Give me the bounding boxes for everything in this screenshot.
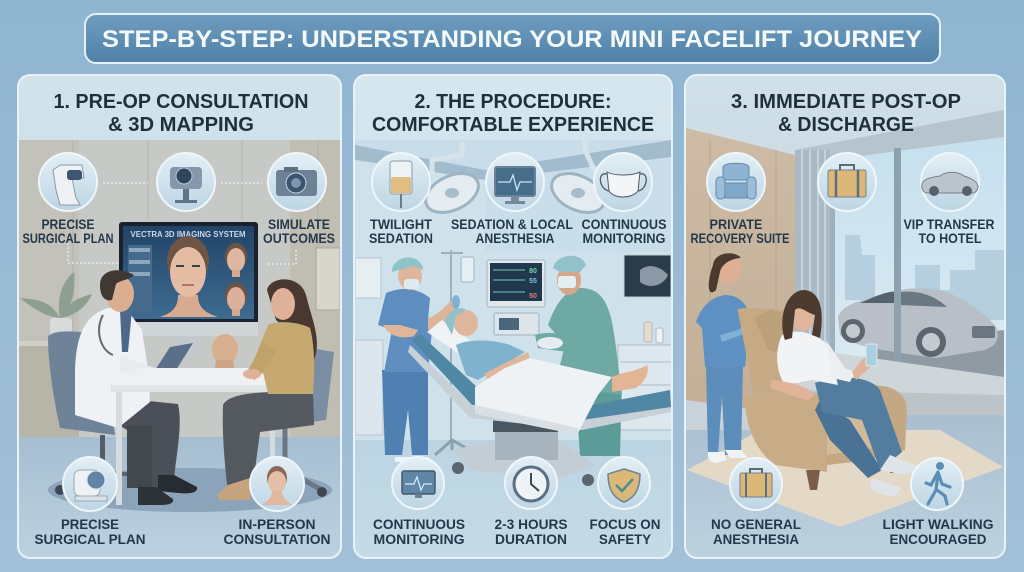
scene: doctor and patient consultation bbox=[19, 140, 340, 558]
label: duration bbox=[494, 517, 568, 547]
icon: IV bag bbox=[372, 153, 430, 211]
label: VIP transfer to hotel: VIP TRANSFER bbox=[904, 217, 995, 232]
label: private recovery suite bbox=[690, 217, 790, 246]
scene: recovery suite bbox=[686, 110, 1004, 558]
icon: camera on stand bbox=[157, 153, 215, 211]
label: focus on safety: FOCUS ON bbox=[590, 517, 660, 532]
panel: immediate post-op and discharge bbox=[685, 75, 1005, 558]
label: precise surgical plan bottom: SURGICAL PLAN bbox=[34, 532, 146, 547]
label: no general anesthesia: NO GENERAL bbox=[711, 517, 801, 532]
label: VIP transfer to hotel bbox=[904, 217, 995, 246]
icon: monitor bottom bbox=[392, 457, 444, 509]
label: light walking encouraged: ENCOURAGED bbox=[890, 532, 987, 547]
label: simulate outcomes: SIMULATE bbox=[268, 217, 330, 232]
label: simulate outcomes: OUTCOMES bbox=[263, 231, 335, 246]
scene: doctor and patient consultation: VECTRA 3D IMAGING SYSTEM bbox=[130, 230, 246, 239]
label: light walking encouraged: LIGHT WALKING bbox=[882, 517, 994, 532]
icon: car bbox=[921, 153, 979, 211]
heading: step 2 bbox=[372, 91, 654, 136]
label: twilight sedation bbox=[369, 217, 433, 246]
heading: step 3: 3. IMMEDIATE POST-OP bbox=[731, 91, 961, 113]
icon: scanner bottom bbox=[63, 457, 117, 511]
label: continuous monitoring bbox=[582, 217, 666, 246]
label: in-person consultation: IN-PERSON bbox=[238, 517, 316, 532]
label: sedation and local anesthesia bbox=[451, 217, 573, 246]
label: no general anesthesia bbox=[711, 517, 801, 547]
panel: the procedure bbox=[354, 75, 672, 558]
heading: step 1: & 3D MAPPING bbox=[108, 114, 254, 136]
scene: operating room: 80 bbox=[529, 268, 537, 275]
icon: vital signs monitor bbox=[486, 153, 544, 211]
label: sedation and local anesthesia: SEDATION & LOCAL bbox=[451, 217, 573, 232]
label: focus on safety: SAFETY bbox=[599, 532, 651, 547]
label: precise surgical plan bbox=[22, 217, 114, 246]
heading: step 1 bbox=[54, 91, 308, 136]
icon: clock bbox=[505, 457, 557, 509]
label: continuous monitoring: MONITORING bbox=[582, 231, 666, 246]
heading: step 3: & DISCHARGE bbox=[778, 114, 914, 136]
label: no general anesthesia: ANESTHESIA bbox=[713, 532, 799, 547]
label: in-person consultation: CONSULTATION bbox=[224, 532, 330, 547]
label: twilight sedation: TWILIGHT bbox=[370, 217, 433, 232]
scene: operating room: 55 bbox=[529, 278, 537, 285]
icon: 3D scanner bbox=[39, 153, 97, 211]
label: duration: DURATION bbox=[495, 532, 567, 547]
label: duration: 2-3 HOURS bbox=[494, 517, 568, 532]
label: continuous monitoring bottom: MONITORING bbox=[374, 532, 464, 547]
icon: camera bbox=[268, 153, 326, 211]
panel: pre-op consultation and 3D mapping bbox=[18, 75, 341, 558]
scene: operating room: 50 bbox=[529, 293, 537, 300]
heading: step 1: 1. PRE-OP CONSULTATION bbox=[54, 91, 308, 113]
label: precise surgical plan bottom: PRECISE bbox=[61, 517, 119, 532]
label: twilight sedation: SEDATION bbox=[369, 231, 433, 246]
label: continuous monitoring: CONTINUOUS bbox=[582, 217, 666, 232]
heading: step 3 bbox=[731, 91, 961, 136]
heading: step 2: 2. THE PROCEDURE: bbox=[414, 91, 612, 113]
label: precise surgical plan: PRECISE bbox=[42, 217, 94, 232]
label: in-person consultation bbox=[224, 517, 330, 547]
label: simulate outcomes bbox=[263, 217, 335, 246]
heading: step 2: COMFORTABLE EXPERIENCE bbox=[372, 114, 654, 136]
title banner: STEP-BY-STEP: UNDERSTANDING YOUR MINI FACELIFT JOURNEY bbox=[102, 26, 922, 53]
icon: armchair bbox=[707, 153, 765, 211]
label: sedation and local anesthesia: ANESTHESIA bbox=[476, 231, 555, 246]
label: private recovery suite: PRIVATE bbox=[710, 217, 762, 232]
label: light walking encouraged bbox=[882, 517, 994, 547]
label: precise surgical plan: SURGICAL PLAN bbox=[22, 231, 114, 246]
label: private recovery suite: RECOVERY SUITE bbox=[690, 231, 790, 246]
label: continuous monitoring bottom bbox=[373, 517, 465, 547]
icon: surgical mask bbox=[594, 153, 652, 211]
label: precise surgical plan bottom bbox=[34, 517, 146, 547]
icon: suitcase bottom bbox=[730, 458, 782, 510]
icon: suitcase bbox=[818, 153, 876, 211]
title banner bbox=[85, 14, 940, 63]
label: focus on safety bbox=[590, 517, 660, 547]
scene: operating room bbox=[355, 140, 671, 486]
icon: patient face bbox=[250, 457, 304, 511]
label: VIP transfer to hotel: TO HOTEL bbox=[918, 231, 982, 246]
label: continuous monitoring bottom: CONTINUOUS bbox=[373, 517, 465, 532]
icon: safety shield bbox=[598, 457, 650, 509]
icon: walking person bbox=[911, 458, 963, 510]
